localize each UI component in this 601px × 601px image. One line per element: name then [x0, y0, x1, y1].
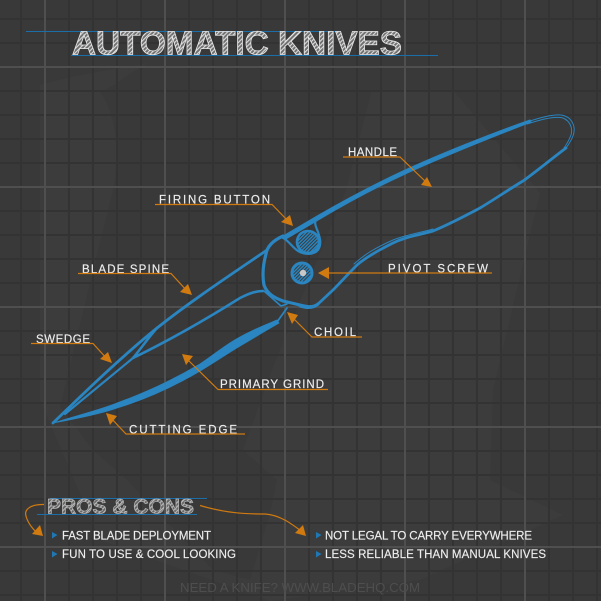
icon: pivot screw — [292, 263, 312, 283]
label: cutting edge: CUTTING EDGE — [129, 424, 237, 436]
icon: firing button — [297, 231, 319, 253]
label: choil — [287, 312, 362, 339]
blade spine and swedge — [53, 250, 267, 423]
label: primary grind — [182, 354, 328, 391]
label: pivot screw — [318, 264, 492, 279]
label: blade spine: BLADE SPINE — [82, 264, 169, 276]
title: AUTOMATIC KNIVES — [72, 24, 402, 62]
heading: pros and cons: PROS & CONS — [47, 496, 194, 518]
arrow: pros — [26, 504, 44, 536]
label: swedge: SWEDGE — [36, 334, 90, 346]
label: firing button — [155, 194, 293, 226]
list: pros — [52, 530, 236, 561]
list: cons: LESS RELIABLE THAN MANUAL KNIVES — [325, 549, 546, 561]
watermark logo — [40, 62, 563, 601]
bolster — [263, 236, 318, 307]
label: cutting edge — [106, 413, 245, 436]
arrow: cons — [200, 506, 306, 536]
label: primary grind: PRIMARY GRIND — [220, 379, 324, 391]
label: choil: CHOIL — [314, 327, 357, 339]
list: cons — [316, 530, 546, 561]
list: pros: FUN TO USE & COOL LOOKING — [62, 549, 236, 561]
label: handle: HANDLE — [348, 147, 397, 159]
list: pros: FAST BLADE DEPLOYMENT — [62, 530, 211, 542]
list: cons: NOT LEGAL TO CARRY EVERYWHERE — [325, 530, 532, 542]
footer: NEED A KNIFE? WWW.BLADEHQ.COM — [180, 580, 420, 595]
handle — [283, 120, 531, 239]
knife outline — [53, 115, 574, 423]
label: swedge — [31, 334, 112, 363]
cutting edge — [53, 320, 279, 423]
label: pivot screw: PIVOT SCREW — [388, 264, 488, 276]
label: firing button: FIRING BUTTON — [159, 194, 270, 206]
label: handle — [343, 147, 432, 187]
button housing — [283, 219, 320, 254]
label: blade spine — [78, 264, 192, 295]
primary grind — [133, 291, 263, 358]
